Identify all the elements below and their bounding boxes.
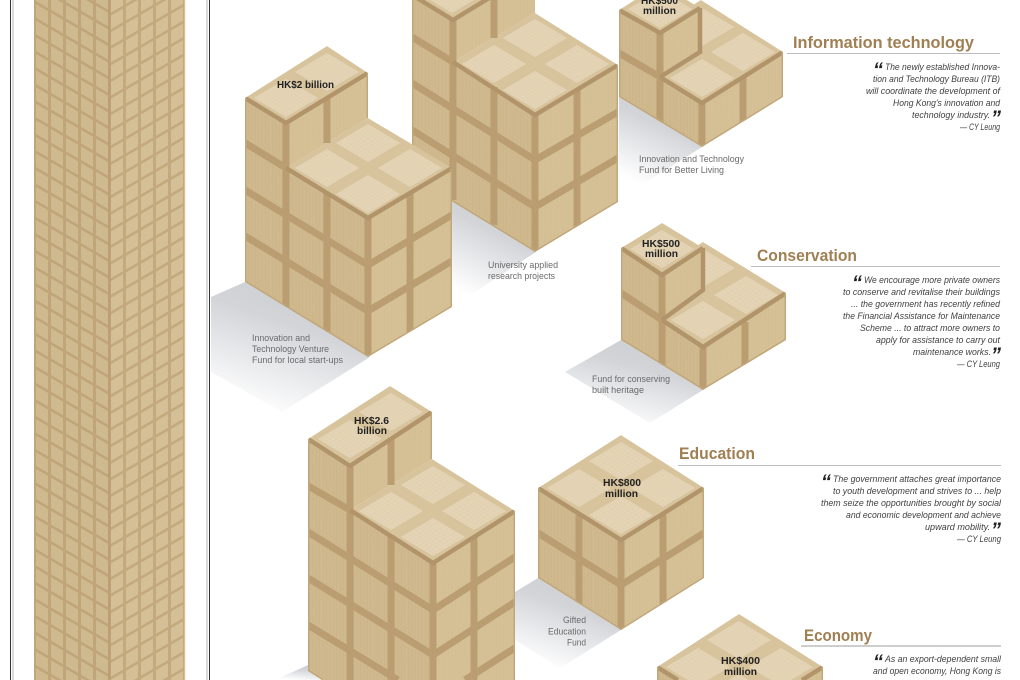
caption: start-up fund [252,333,343,366]
value label: HK$2.6 [354,415,389,427]
caption: gifted education fund [548,615,586,648]
quote: conservation: ” [991,344,1001,366]
quote: information technology: “ [873,60,883,82]
quote: conservation: to conserve and revitalise their buildings [843,287,1000,298]
shadow: lower block [275,665,335,680]
value label: HK$800 [603,477,641,489]
caption: gifted education fund: Fund [567,638,586,648]
quote: education: — CY Leung [956,534,1002,545]
quote: conservation: “ [852,272,862,294]
caption: start-up fund: Technology Venture [252,344,329,355]
block stack: HK$400 million economy [657,614,823,680]
caption: built heritage fund: built heritage [592,385,644,396]
caption: better living fund: Innovation and Technology [639,154,744,165]
quote: information technology: tion and Technology Bureau (ITB) [873,74,1000,85]
quote: conservation: Scheme ... to attract more owners to [860,323,1000,334]
caption: university research: University applied [488,260,558,271]
quote: education: and economic development and achieve [846,510,1001,521]
caption: start-up fund: Innovation and [252,333,310,344]
shadow: university research [452,200,536,300]
tall tower of blocks [34,0,185,680]
value label: million [643,5,676,17]
value label: HK$2 billion [277,79,334,91]
shadow: gifted education fund [515,578,621,668]
heading: economy: Economy [804,626,872,645]
quote: conservation: — CY Leung [956,359,1001,370]
quote: conservation: maintenance works. [913,347,991,358]
quote: economy: As an export-dependent small [884,654,1002,665]
quote: economy: “ [873,652,883,674]
shadow: better living fund [619,97,702,186]
block stack: HK$2.6 billion [308,386,515,680]
caption: gifted education fund: Education [548,626,586,638]
quote: information technology [866,60,1001,133]
quote: education: them seize the opportunities brought by social [821,498,1002,509]
caption: university research [488,260,558,282]
quote: information technology: technology industry. [912,110,990,121]
value label: HK$400 [721,655,760,667]
value label [604,478,641,497]
quote: information technology: — CY Leung [959,122,1001,133]
caption: better living fund: Fund for Better Living [639,165,724,176]
quote: education: “ [821,472,831,494]
quote: conservation: We encourage more private owners [864,275,1000,286]
quote: conservation [843,272,1001,370]
value label: HK$500 [642,238,680,250]
block stack: HK$500 million information technology [619,0,783,147]
quote: conservation: apply for assistance to carry out [876,335,1000,346]
value label: billion [357,425,387,437]
value label [722,656,760,675]
shadow: built heritage fund [565,340,703,423]
quote: economy: and open economy, Hong Kong is [873,666,1001,677]
value label: million [605,488,638,500]
caption: built heritage fund: Fund for conserving [592,374,670,385]
value label [354,416,389,434]
block stack: HK$2 billion innovation venture fund [245,46,452,357]
frame: left double rule [10,0,14,680]
quote: education: ” [991,520,1001,542]
quote: education [821,472,1002,545]
quote: conservation: ... the government has recently refined [851,299,1001,310]
shadow: start-up fund [211,282,370,412]
block stack: HK$500 million conservation [621,223,786,390]
quote: information technology: will coordinate the development of [866,86,1001,97]
quote: information technology: The newly established Innova- [885,62,1000,73]
block stack: HK$800 million education [538,435,704,630]
quote: information technology: ” [991,108,1001,130]
quote: education: to youth development and strives to ... help [833,486,1001,497]
quote: information technology: Hong Kong's innovation and [893,98,1001,109]
quote: economy [873,652,1002,677]
value label [642,240,680,257]
caption: better living fund [639,154,744,176]
frame: right double rule [206,0,210,680]
heading: conservation: Conservation [757,246,857,265]
caption: university research: research projects [488,271,555,282]
quote: education: The government attaches great importance [833,474,1001,485]
quote: education: upward mobility. [925,522,990,533]
block stack: university applied research [412,0,618,252]
caption: start-up fund: Fund for local start-ups [252,355,343,366]
quote: conservation: the Financial Assistance for Maintenance [843,311,1000,322]
heading: information technology: Information technology [793,33,975,52]
value label [642,0,678,14]
heading: education: Education [679,444,755,463]
caption: built heritage fund [592,374,670,396]
value label: million [645,248,678,260]
caption: gifted education fund: Gifted [563,615,586,626]
value label: million [724,666,757,678]
